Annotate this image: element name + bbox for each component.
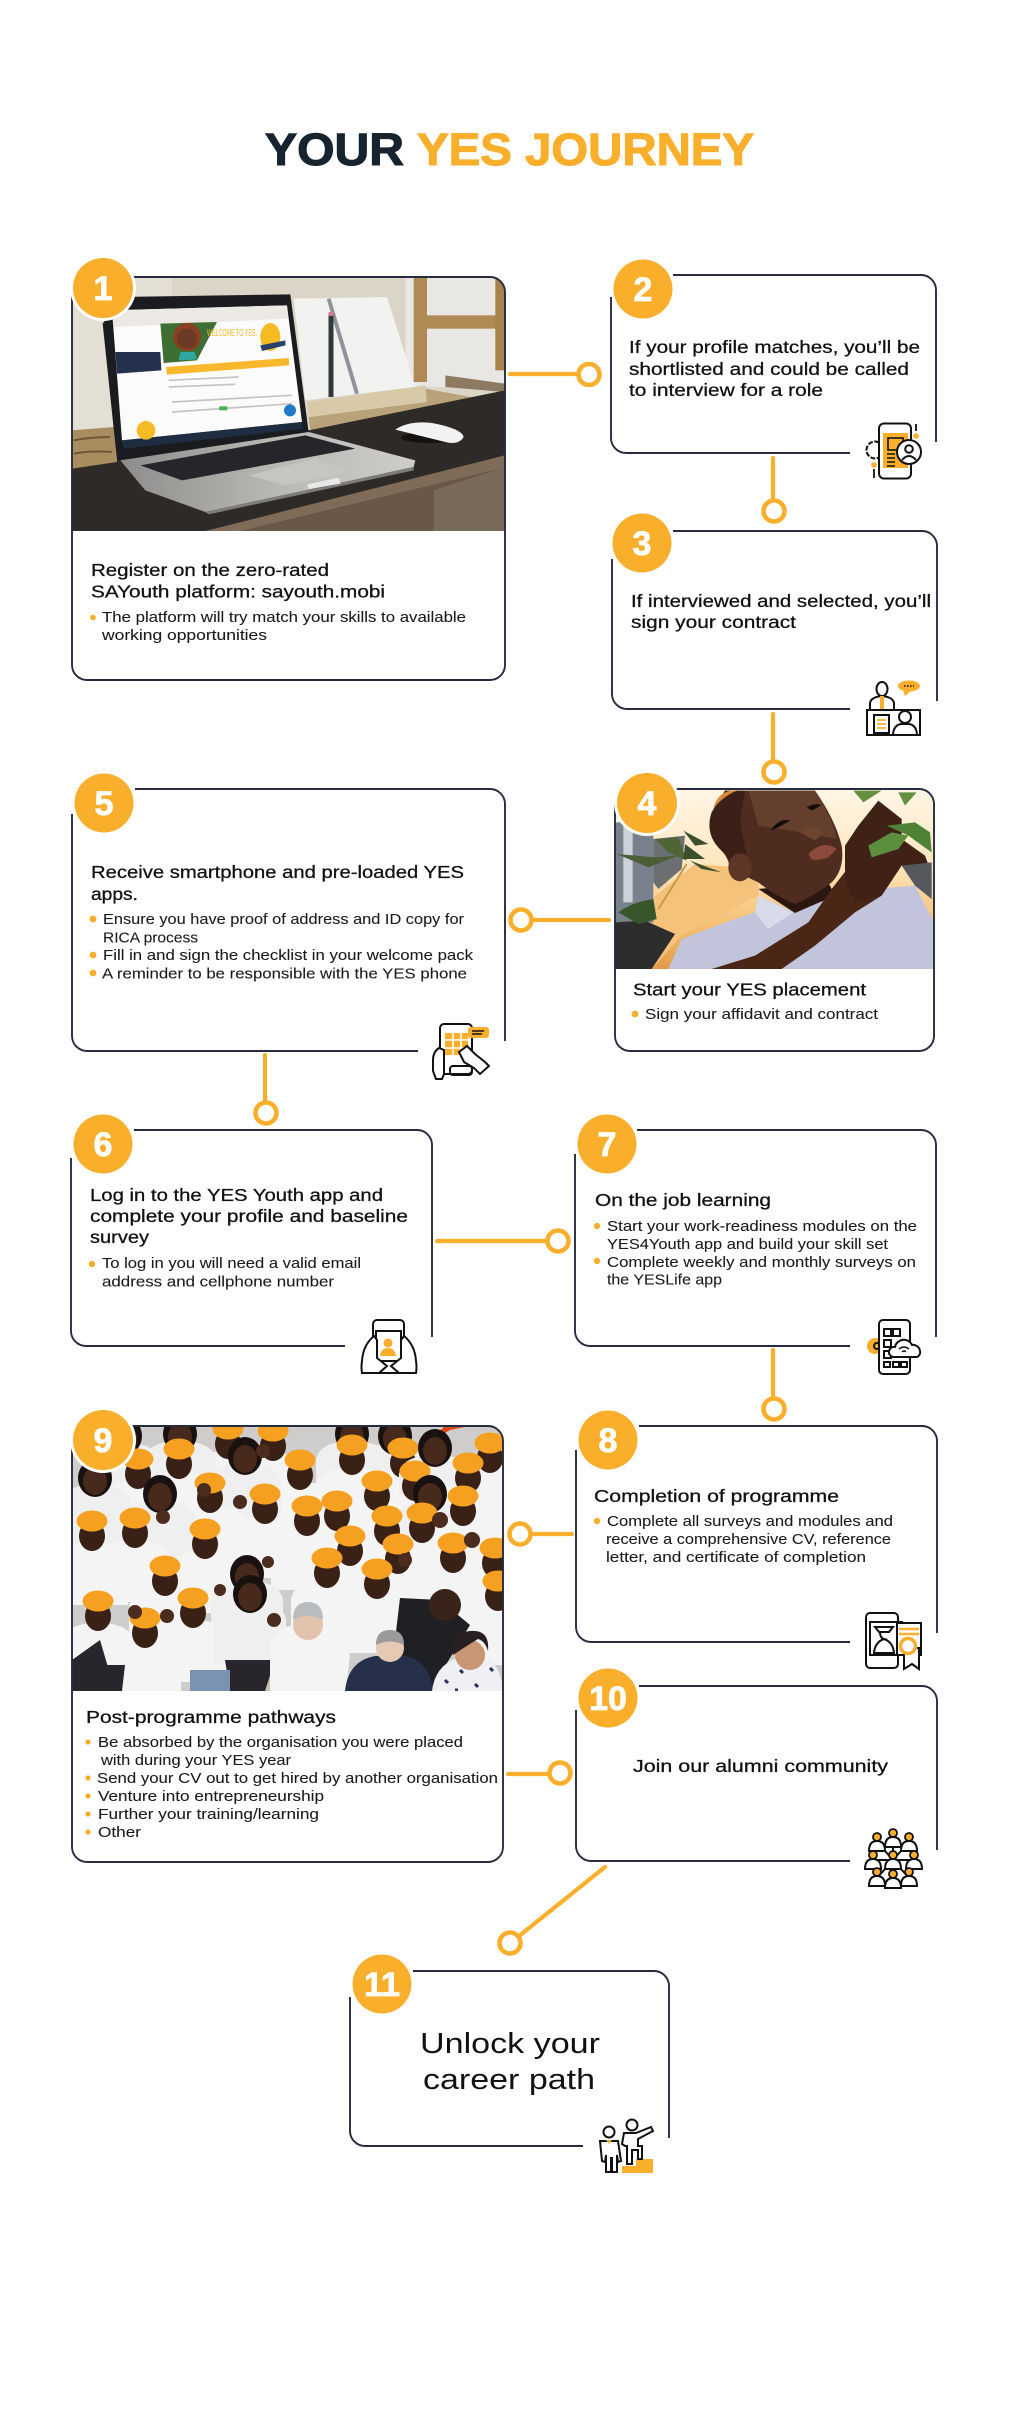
text block: to interview for a role [629,380,823,400]
heading: Post-programme pathways [86,1707,336,1727]
bullet list: Venture into entrepreneurship [98,1788,324,1805]
badge: number 6: 6 [94,1126,112,1164]
panel outline [72,1426,503,1862]
panel: step 8 [576,1410,937,1669]
bullet list: letter, and certificate of completion [606,1549,866,1566]
badge: number 9: 9 [94,1422,112,1460]
badge: number 7 [578,1114,636,1174]
arrow: step 1 to 2 [510,364,600,385]
heading: complete your profile and baseline [90,1206,408,1226]
badge: number 10 [578,1668,638,1728]
panel outline [350,1971,669,2146]
arrow: step 5 to 6 [256,1055,276,1124]
arrow: step 6 to 7 [437,1230,568,1252]
heading: survey [90,1227,149,1247]
panel outline [72,789,505,1051]
arrow: step 10 to 11 [500,1867,605,1954]
heading: Receive smartphone and pre-loaded YES [91,862,464,882]
panel: step 11 [350,1954,669,2173]
arrow: step 3 to 4 [764,714,784,782]
text block [631,591,931,632]
text block: Join our alumni community [633,1756,888,1776]
arrow: step 7 to 8 [764,1350,784,1420]
badge: number 11: 11 [364,1966,400,2004]
text block [420,2028,600,2096]
panel outline [612,531,937,709]
text block: career path [423,2064,595,2096]
bullet list: receive a comprehensive CV, reference [606,1531,891,1548]
panel: step 7 [575,1114,936,1374]
photo: laptop on desk [72,277,505,531]
bullet list: Further your training/learning [98,1806,319,1823]
badge: number 11 [352,1954,412,2014]
bullet list: A reminder to be responsible with the YES phone [102,966,467,982]
badge: number 8 [578,1410,638,1470]
bullet list [594,1513,893,1566]
text block: shortlisted and could be called [629,359,909,379]
icon: career path figures [600,2120,653,2173]
panel: step 4 [614,770,934,1051]
heading: Start your YES placement [633,980,866,1000]
heading [91,560,385,602]
bullet list [90,911,474,982]
bullet list: Send your CV out to get hired by another organisation [97,1770,498,1787]
photo: laptop on desk: WELCOME TO YES. [207,328,257,339]
badge: number 2 [614,260,672,318]
bullet list: address and cellphone number [102,1274,334,1290]
text block [629,337,920,400]
bullet list: To log in you will need a valid email [102,1255,361,1272]
heading: On the job learning [595,1190,771,1210]
arrow: step 2 to 3 [764,458,784,522]
panel outline [615,789,934,1051]
arrow: step 8 to 9 [510,1524,572,1544]
title: YOUR [265,124,404,175]
title [265,124,754,175]
bullet list [85,1734,498,1841]
bullet list: Complete all surveys and modules and [607,1513,893,1530]
bullet list: with during your YES year [100,1752,291,1769]
panel outline [575,1130,936,1346]
text block: If your profile matches, you’ll be [629,337,920,357]
bullet list [90,609,466,644]
panel: step 2 [611,260,936,478]
badge: number 4: 4 [638,785,657,823]
badge: number 5: 5 [95,785,113,823]
bullet list [89,1255,361,1290]
bullet list: YES4Youth app and build your skill set [607,1236,889,1253]
badge: number 3: 3 [633,525,651,563]
panel: step 10 [576,1668,937,1888]
panel outline [71,1130,432,1346]
panel outline [611,275,936,453]
badge: number 3 [612,514,672,572]
panel: step 1 [70,255,505,680]
text block: Unlock your [420,2028,600,2060]
panel: step 9 [56,1407,534,1862]
panel outline [576,1426,937,1642]
bullet list: The platform will try match your skills to available [102,609,466,626]
bullet list: Fill in and sign the checklist in your welcome pack [103,947,474,964]
panel outline [576,1686,937,1861]
icon: certificate and graduate phone [866,1613,921,1669]
arrow: step 4 to 5 [510,910,609,930]
bullet list: Complete weekly and monthly surveys on [607,1254,916,1271]
heading [91,862,464,904]
bullet list: working opportunities [101,627,267,644]
panel outline [72,277,505,680]
heading: apps. [91,884,138,904]
bullet list: Other [98,1824,141,1841]
photo: crowd in orange caps [72,1427,502,1691]
heading [90,1185,408,1247]
panel: step 6 [71,1114,432,1373]
badge: number 6 [74,1114,132,1174]
badge: number 2: 2 [634,271,652,309]
heading: Register on the zero-rated [91,560,329,580]
badge: number 4 [614,770,680,836]
text block: If interviewed and selected, you’ll [631,591,931,611]
bullet list: Ensure you have proof of address and ID copy for [103,911,464,928]
badge: number 9 [70,1407,136,1473]
panel: step 3 [612,514,937,735]
heading: Log in to the YES Youth app and [90,1185,383,1205]
icon: phone held in hands [362,1320,416,1373]
bullet list: Be absorbed by the organisation you were placed [98,1734,463,1751]
badge: number 1 [70,255,136,321]
arrow: step 9 to 10 [508,1762,570,1784]
icon: alumni network [865,1829,922,1888]
icon: phone with cloud [867,1320,920,1374]
bullet list: Sign your affidavit and contract [645,1006,879,1023]
icon: phone profile [866,424,921,478]
badge: number 5 [74,774,134,832]
heading: SAYouth platform: sayouth.mobi [91,582,385,602]
bullet list: Start your work-readiness modules on the [607,1218,917,1235]
icon: smartphone with hands [433,1024,489,1079]
bullet list: the YESLife app [607,1272,722,1288]
icon: interview [867,680,920,735]
badge: number 7: 7 [598,1126,616,1164]
badge: number 1: 1 [94,270,112,308]
bullet list: RICA process [103,930,198,946]
heading: Completion of programme [594,1486,839,1506]
bullet list [594,1218,917,1288]
panel: step 5 [72,774,505,1079]
title: YES JOURNEY [417,124,754,175]
text block: sign your contract [631,612,796,632]
badge: number 10: 10 [589,1680,627,1718]
badge: number 8: 8 [599,1422,617,1460]
photo: man tending plant [615,789,934,969]
